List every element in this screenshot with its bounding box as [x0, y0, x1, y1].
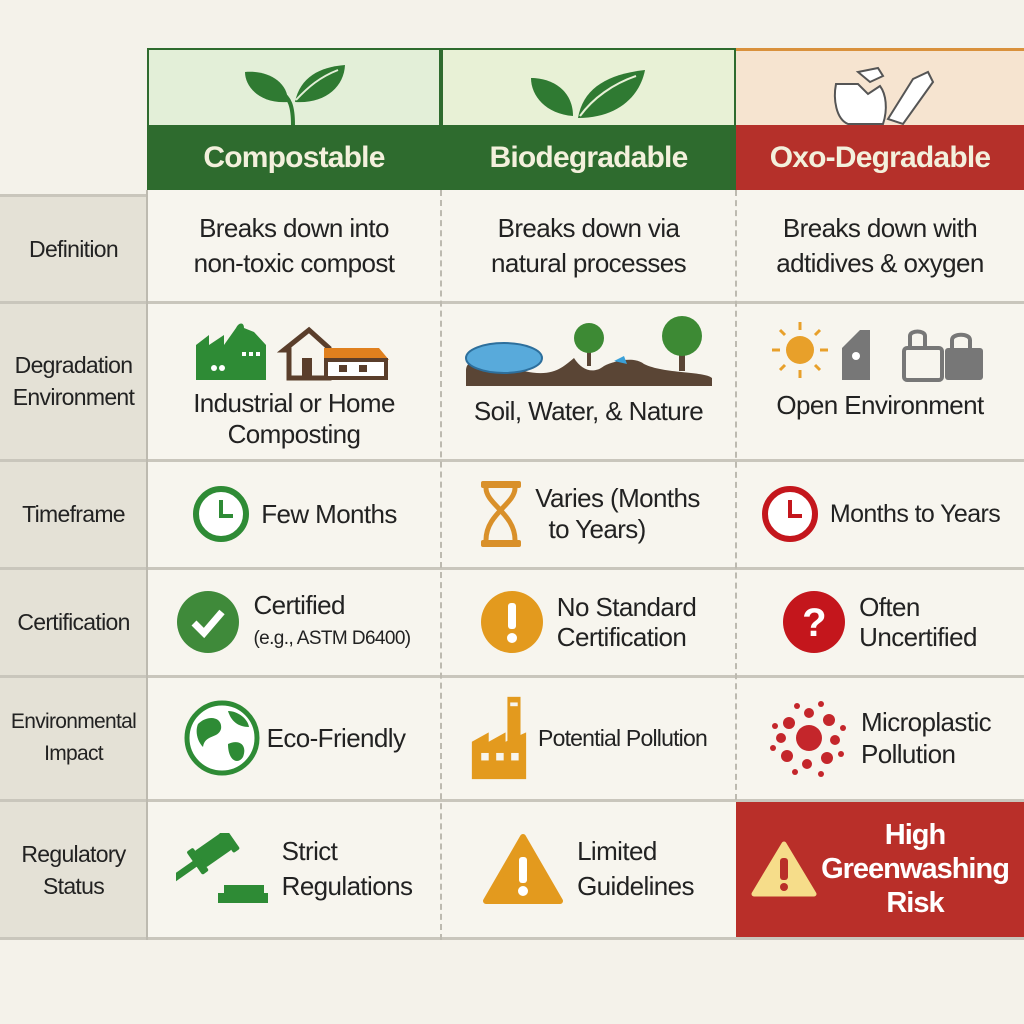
row: certification	[177, 590, 977, 653]
row: timeframe	[193, 481, 1000, 547]
text: oxo definition	[736, 190, 1024, 302]
cell: microplastic	[736, 676, 1024, 800]
icon: leaf biodegradable	[531, 70, 645, 118]
row: definition	[194, 213, 984, 278]
cell: potential pollution: Potential Pollution	[538, 724, 707, 750]
label: Environmental Impact	[0, 676, 147, 800]
cell: uncertified: Often	[859, 592, 920, 622]
cell: limited: Limited	[577, 836, 657, 866]
icon: plastic bag	[834, 66, 934, 125]
cell: bio environment	[441, 302, 736, 460]
icon: leaf compostable	[245, 65, 345, 125]
cell: uncertified	[736, 568, 1024, 676]
cell: varies: Varies (Months	[535, 483, 700, 513]
icon: hourglass	[481, 481, 521, 547]
cell: compost environment: Composting	[228, 419, 360, 449]
cell: limited: Guidelines	[577, 871, 694, 901]
label: Certification: Certification	[17, 609, 130, 635]
label: Environmental Impact: Impact	[44, 742, 103, 765]
icon: yellow warning	[752, 842, 816, 896]
icon: exclamation	[481, 591, 543, 653]
icon: question: ?	[802, 601, 826, 645]
row: impact	[184, 696, 991, 780]
cell: limited	[441, 800, 736, 938]
cell: strict: Regulations	[282, 871, 412, 901]
icon: red clock	[762, 486, 818, 542]
cell: certified	[147, 568, 441, 676]
cell: certified: (e.g., ASTM D6400)	[253, 628, 411, 649]
cell: few months	[147, 460, 441, 568]
label: Definition	[0, 195, 147, 302]
cell: no standard: No Standard	[557, 592, 696, 622]
header band: Compostable	[147, 125, 441, 190]
text: biodegradable definition: natural processes	[491, 248, 686, 278]
cell: bio environment: Soil, Water, & Nature	[474, 396, 703, 426]
text: biodegradable definition	[441, 190, 736, 302]
icon: warning triangle	[483, 834, 563, 904]
label: Degradation Environment	[0, 302, 147, 460]
label: Certification	[0, 568, 147, 676]
cell: compost environment: Industrial or Home	[193, 388, 395, 418]
label: Degradation Environment: Environment	[13, 384, 134, 410]
cell: varies: to Years)	[548, 514, 646, 544]
cell: varies	[441, 460, 736, 568]
text: compostable definition: non-toxic compost	[194, 248, 394, 278]
cell: no standard: Certification	[557, 622, 686, 652]
text: compostable definition: Breaks down into	[199, 213, 389, 243]
cell: microplastic: Microplastic	[861, 707, 991, 737]
icon: green clock	[193, 486, 249, 542]
cell: high greenwashing risk: Greenwashing	[821, 853, 1009, 885]
label: Degradation Environment: Degradation	[15, 352, 132, 378]
icon: factory and house	[196, 324, 389, 380]
label: Timeframe	[0, 460, 147, 568]
cell: oxo environment: Open Environment	[776, 390, 984, 420]
icon: check	[177, 591, 239, 653]
cell: potential pollution	[441, 676, 736, 800]
cell: months to years: Months to Years	[830, 500, 1000, 528]
header band: Biodegradable: Biodegradable	[490, 140, 687, 174]
cell: strict: Strict	[282, 836, 337, 866]
cell: uncertified: Uncertified	[859, 622, 977, 652]
icon: question	[783, 591, 845, 653]
cell: oxo environment	[736, 302, 1024, 460]
cell: eco friendly: Eco-Friendly	[267, 722, 405, 752]
cell: certified: Certified	[253, 590, 345, 620]
label: Definition: Definition	[29, 236, 118, 262]
icon: soil, water, trees	[465, 316, 712, 386]
label: Timeframe: Timeframe	[22, 501, 125, 527]
icon: sun and containers	[772, 322, 983, 382]
text: compostable definition	[147, 190, 441, 302]
header band: Biodegradable	[441, 125, 736, 190]
row: environment	[193, 316, 984, 449]
text: oxo definition: adtidives & oxygen	[776, 248, 984, 278]
cell: months to years	[736, 460, 1024, 568]
cell: high greenwashing risk: High	[885, 819, 945, 851]
cell: compost environment	[147, 302, 441, 460]
header band: Oxo-Degradable: Oxo-Degradable	[770, 140, 990, 174]
header: compostable top	[147, 48, 441, 125]
cell: high greenwashing risk: Risk	[886, 887, 944, 919]
label: Regulatory Status: Status	[43, 873, 104, 899]
label: Environmental Impact: Environmental	[11, 710, 136, 733]
label: Regulatory Status: Regulatory	[21, 841, 126, 867]
icon: factory	[472, 696, 526, 780]
header band: Oxo-Degradable	[736, 125, 1024, 190]
cell: microplastic: Pollution	[861, 739, 955, 769]
icon: globe	[184, 700, 260, 776]
header: oxo top	[736, 48, 1024, 125]
cell: few months: Few Months	[261, 498, 397, 528]
cell: eco friendly	[147, 676, 441, 800]
row: regulatory	[176, 802, 1024, 937]
icon: gavel	[176, 833, 268, 903]
cell: strict	[147, 800, 441, 938]
header: biodegradable top	[441, 48, 736, 125]
label: Regulatory Status	[0, 800, 147, 940]
text: oxo definition: Breaks down with	[783, 213, 977, 243]
icon: microplastic dots	[770, 701, 846, 777]
row labels	[0, 197, 146, 937]
cell: no standard	[441, 568, 736, 676]
cell: high greenwashing risk	[736, 800, 1024, 938]
header band: Compostable: Compostable	[203, 140, 385, 174]
text: biodegradable definition: Breaks down via	[498, 213, 679, 243]
